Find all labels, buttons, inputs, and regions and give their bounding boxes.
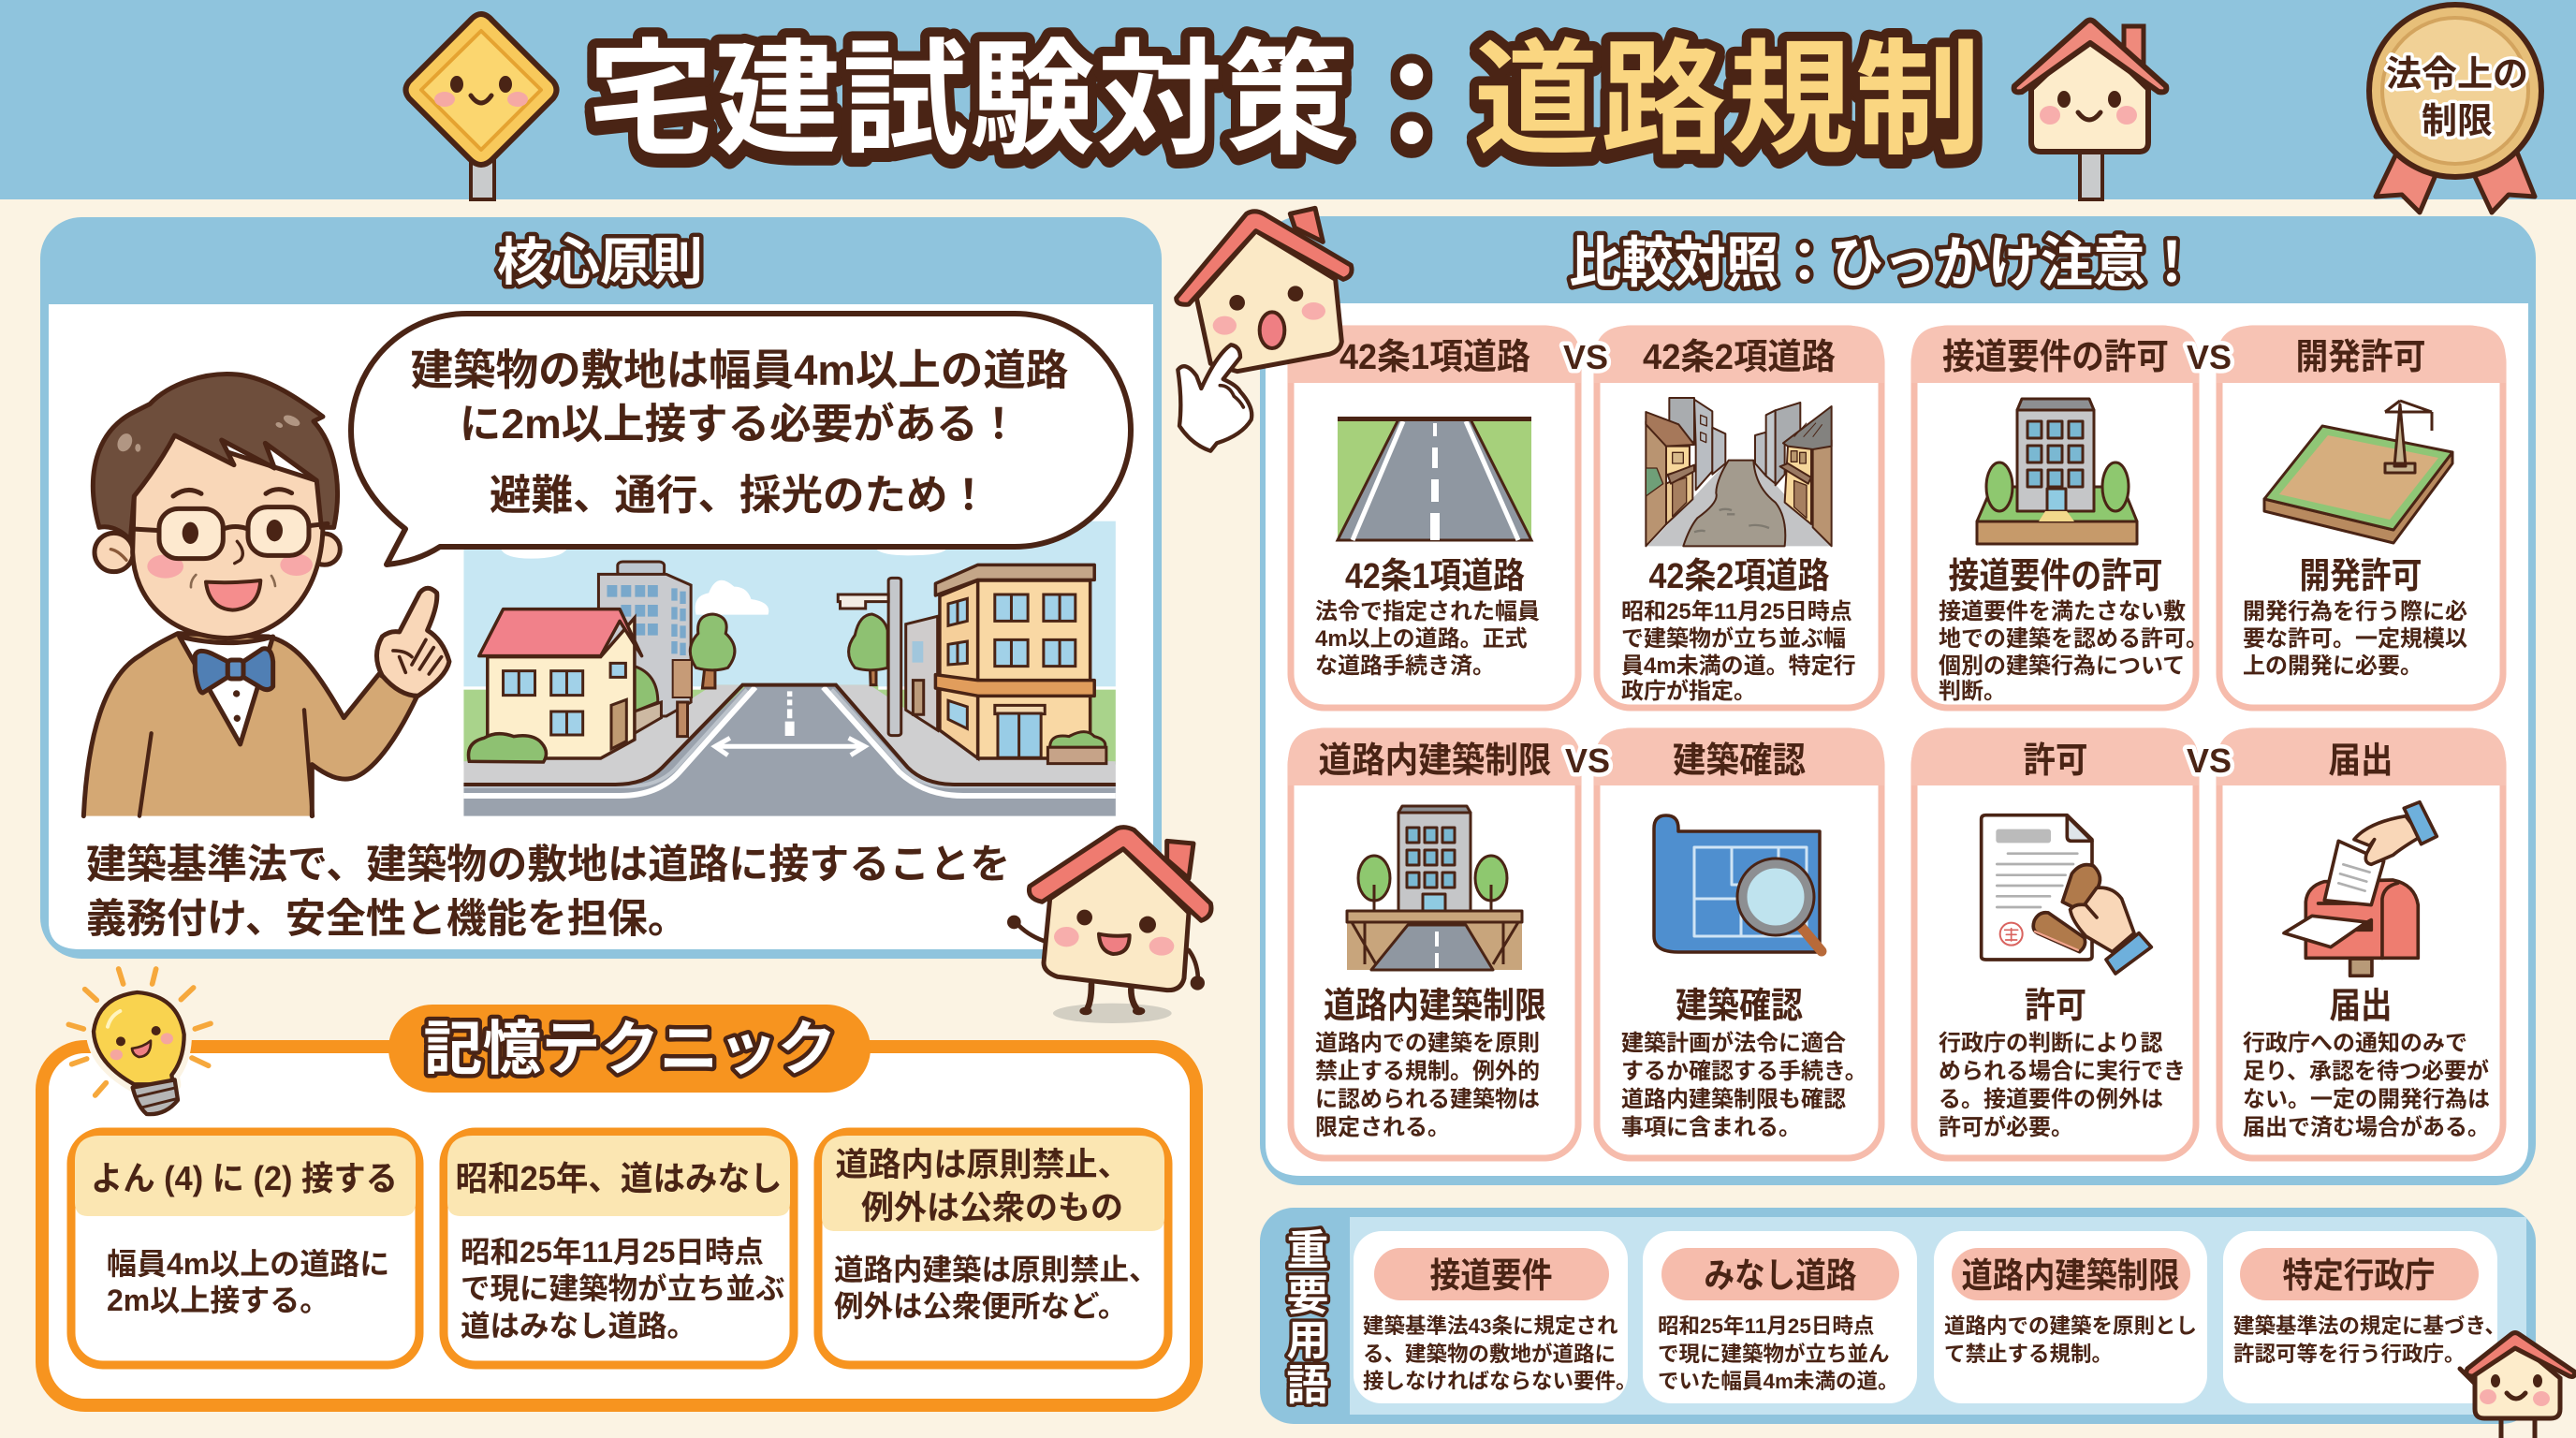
- term: 道路内建築制限: 道路内建築制限: [1962, 1256, 2179, 1295]
- heading pill: 記憶テクニック: 記憶テクニック: [423, 1017, 837, 1082]
- card: 建築確認: 道路内建築制限も確認: [1621, 1087, 1846, 1112]
- card: 昭和25年、道はみなし: で現に建築物が立ち並ぶ: [461, 1271, 785, 1305]
- term: 特定行政庁: 許認可等を行う行政庁。: [2233, 1343, 2466, 1366]
- card: 許可: る。接道要件の例外は: [1939, 1087, 2163, 1112]
- card: 建築確認: するか確認する手続き。: [1621, 1059, 1867, 1084]
- card: 許可: [1911, 728, 2199, 1158]
- card: よん(4)に(2)接する: よん (4) に (2) 接する: [91, 1159, 398, 1197]
- icon: blueprint and magnifier: [1654, 815, 1822, 952]
- callout: speech bubble: 避難、通行、採光のため！: [490, 473, 989, 519]
- icon: building on plot: [1977, 399, 2137, 544]
- card: 42条2項道路: 42条2項道路: [1643, 338, 1836, 377]
- card: 昭和25年、道はみなし: 昭和25年11月25日時点: [461, 1235, 764, 1269]
- card: 届出: ない。一定の開発行為は: [2243, 1087, 2490, 1112]
- card: 道路内建築制限: 限定される。: [1315, 1115, 1450, 1140]
- icon: building over road: [1347, 806, 1522, 970]
- card: 開発許可: 開発許可: [2295, 338, 2426, 377]
- card: 接道要件の許可: [1911, 326, 2208, 708]
- card: 42条1項道路: 4m以上の道路。正式: [1315, 626, 1528, 652]
- term: みなし道路: 昭和25年11月25日時点: [1658, 1314, 1874, 1338]
- card: 接道要件の許可: 接道要件の許可: [1949, 557, 2162, 596]
- term: 接道要件: [1354, 1231, 1637, 1403]
- panel: 核心原則: [40, 217, 1162, 959]
- card: 42条2項道路: 昭和25年11月25日時点: [1621, 599, 1852, 624]
- card: 道路内建築制限: 道路内での建築を原則: [1315, 1031, 1540, 1056]
- illustration: teacher pointing: [83, 374, 449, 816]
- card: 道路内は原則禁止: 例外は公衆便所など。: [834, 1289, 1127, 1323]
- badge: 法令上の制限: 法令上の: [2386, 55, 2528, 95]
- term: 接道要件: 接しなければならない要件。: [1363, 1370, 1637, 1393]
- vs labels: VS: [1565, 741, 1610, 780]
- card: 42条1項道路: [1288, 326, 1581, 708]
- card: 42条2項道路: [1594, 326, 1884, 708]
- card: 届出: 届出: [2329, 741, 2393, 781]
- badge: 法令上の制限: [2369, 5, 2541, 213]
- heading pill: 記憶テクニック: [388, 1005, 871, 1093]
- term: みなし道路: で現に建築物が立ち並ん: [1658, 1342, 1890, 1366]
- term: 接道要件: 接道要件: [1430, 1256, 1552, 1295]
- card: 道路内建築制限: 道路内建築制限: [1324, 987, 1546, 1026]
- card: 42条1項道路: 法令で指定された幅員: [1315, 599, 1540, 624]
- card: 接道要件の許可: 接道要件を満たさない敷: [1939, 598, 2186, 624]
- card: 道路内は原則禁止: [818, 1132, 1168, 1365]
- callout: speech bubble: に2m以上接する必要がある！: [460, 402, 1019, 448]
- card: よん(4)に(2)接する: 2m以上接する。: [107, 1284, 329, 1317]
- icon: light bulb: [68, 969, 211, 1114]
- card: 42条2項道路: 42条2項道路: [1649, 557, 1829, 596]
- card: 接道要件の許可: 地での建築を認める許可。: [1939, 626, 2208, 652]
- callout: speech bubble: [351, 314, 1131, 565]
- card: 42条1項道路: 42条1項道路: [1339, 338, 1530, 377]
- card: 届出: 届出: [2329, 987, 2393, 1026]
- text: core principle summary: 義務付け、安全性と機能を担保。: [86, 897, 688, 942]
- card: 昭和25年、道はみなし: 昭和25年、道はみなし: [455, 1159, 783, 1197]
- icon: development site with crane: [2264, 401, 2452, 543]
- card: 42条2項道路: 政庁が指定。: [1621, 678, 1756, 704]
- term: 道路内建築制限: [1934, 1231, 2207, 1403]
- heading: 比較対照: 比較対照：ひっかけ注意！: [1569, 232, 2198, 294]
- card: 道路内建築制限: 禁止する規制。例外的: [1315, 1059, 1540, 1084]
- heading: 重要用語: 用: [1286, 1316, 1329, 1364]
- card: 届出: [2217, 728, 2506, 1158]
- title: ：: [1351, 38, 1472, 175]
- card: 42条2項道路: 員4m未満の道。特定行: [1621, 653, 1856, 679]
- card: 届出: 行政庁への通知のみで: [2243, 1031, 2467, 1056]
- heading: 重要用語: [1286, 1226, 1329, 1409]
- card: 建築確認: 事項に含まれる。: [1621, 1115, 1801, 1140]
- card: 建築確認: 建築計画が法令に適合: [1621, 1030, 1846, 1056]
- card: 届出: 足り、承認を待つ必要が: [2243, 1058, 2489, 1084]
- card: よん(4)に(2)接する: [71, 1132, 419, 1365]
- term: 道路内建築制限: て禁止する規制。: [1944, 1343, 2113, 1366]
- heading: 核心原則: 核心原則: [497, 233, 703, 291]
- panel: 重要用語: [1260, 1208, 2536, 1424]
- term: みなし道路: みなし道路: [1704, 1256, 1857, 1295]
- term: 特定行政庁: 特定行政庁: [2282, 1256, 2436, 1295]
- icon: narrow old alley: [1646, 398, 1832, 546]
- mascot: surprised house pointing: [1177, 208, 1352, 451]
- term: 特定行政庁: [2223, 1231, 2506, 1403]
- heading: 重要用語: 重: [1286, 1226, 1329, 1274]
- card: 道路内建築制限: [1288, 728, 1581, 1158]
- heading: 重要用語: 要: [1286, 1271, 1329, 1319]
- title: 道路規制: [1473, 31, 1983, 170]
- card: 昭和25年、道はみなし: 道はみなし道路。: [461, 1309, 696, 1343]
- title: 宅建試験対策: [588, 31, 1352, 170]
- card: 42条1項道路: 42条1項道路: [1345, 557, 1525, 596]
- card: 道路内は原則禁止: 道路内建築は原則禁止、: [834, 1253, 1159, 1286]
- card: 道路内建築制限: に認められる建築物は: [1315, 1087, 1540, 1112]
- card: 建築確認: 建築確認: [1673, 741, 1806, 781]
- illustration: street scene: [463, 521, 1116, 816]
- icon: stamp on document: [1982, 815, 2151, 974]
- mascot: corner house: [2460, 1333, 2574, 1438]
- card: 42条2項道路: で建築物が立ち並ぶ幅: [1621, 625, 1846, 652]
- badge: 法令上の制限: 制限: [2422, 102, 2493, 141]
- icon: hand posting into mailbox: [2284, 802, 2437, 976]
- term: 特定行政庁: 建築基準法の規定に基づき、: [2233, 1314, 2506, 1338]
- card: 道路内は原則禁止: 例外は公衆のもの: [861, 1190, 1123, 1226]
- card: 道路内は原則禁止: 道路内は原則禁止、: [835, 1147, 1131, 1183]
- vs labels: [1563, 338, 2232, 780]
- vs labels: VS: [2187, 338, 2232, 376]
- icon: straight road: [1338, 417, 1531, 540]
- card: 開発許可: 要な許可。一定規模以: [2243, 626, 2467, 652]
- card: 許可: 許可が必要。: [1939, 1114, 2073, 1140]
- card: 許可: 許可: [2024, 741, 2087, 781]
- panel: 記憶テクニック: [42, 969, 1196, 1405]
- card: 建築確認: [1594, 728, 1884, 1158]
- card: 建築確認: 建築確認: [1676, 987, 1803, 1026]
- vs labels: VS: [2187, 741, 2232, 780]
- title: [588, 31, 1983, 175]
- vs labels: VS: [1563, 338, 1608, 376]
- icon: house mascot sign: [2014, 21, 2166, 199]
- card: 開発許可: 上の開発に必要。: [2243, 653, 2422, 679]
- header band: [0, 0, 2576, 199]
- term: 接道要件: 建築基準法43条に規定され: [1363, 1314, 1618, 1338]
- term: みなし道路: でいた幅員4m未満の道。: [1658, 1370, 1899, 1393]
- card: 道路内建築制限: 道路内建築制限: [1318, 741, 1552, 781]
- mascot: waving house: [1007, 828, 1211, 1023]
- card: 許可: められる場合に実行でき: [1939, 1059, 2186, 1084]
- card: 開発許可: [2217, 326, 2506, 708]
- card: 開発許可: 開発行為を行う際に必: [2243, 599, 2467, 624]
- card: 許可: 許可: [2025, 987, 2086, 1026]
- card: 昭和25年、道はみなし: [444, 1132, 794, 1365]
- text: core principle summary: 建築基準法で、建築物の敷地は道路に接することを: [86, 843, 1010, 888]
- card: 届出: 届出で済む場合がある。: [2243, 1114, 2490, 1140]
- heading: 重要用語: 語: [1286, 1361, 1329, 1409]
- card: 接道要件の許可: 接道要件の許可: [1942, 338, 2169, 377]
- card: よん(4)に(2)接する: 幅員4m以上の道路に: [107, 1247, 389, 1281]
- text: core principle summary: [86, 843, 1010, 942]
- card: 42条1項道路: な道路手続き済。: [1315, 653, 1495, 679]
- term: 道路内建築制限: 道路内での建築を原則とし: [1944, 1314, 2197, 1338]
- callout: speech bubble: 建築物の敷地は幅員4m以上の道路: [411, 346, 1068, 394]
- card: 接道要件の許可: 個別の建築行為について: [1939, 653, 2185, 679]
- card: 接道要件の許可: 判断。: [1939, 679, 2006, 704]
- term: 接道要件: る、建築物の敷地が道路に: [1363, 1342, 1616, 1366]
- term: みなし道路: [1643, 1231, 1917, 1403]
- panel: 比較対照: [1260, 216, 2536, 1185]
- card: 許可: 行政庁の判断により認: [1939, 1031, 2163, 1056]
- icon: smiling road sign: [406, 14, 556, 199]
- card: 開発許可: 開発許可: [2299, 557, 2422, 596]
